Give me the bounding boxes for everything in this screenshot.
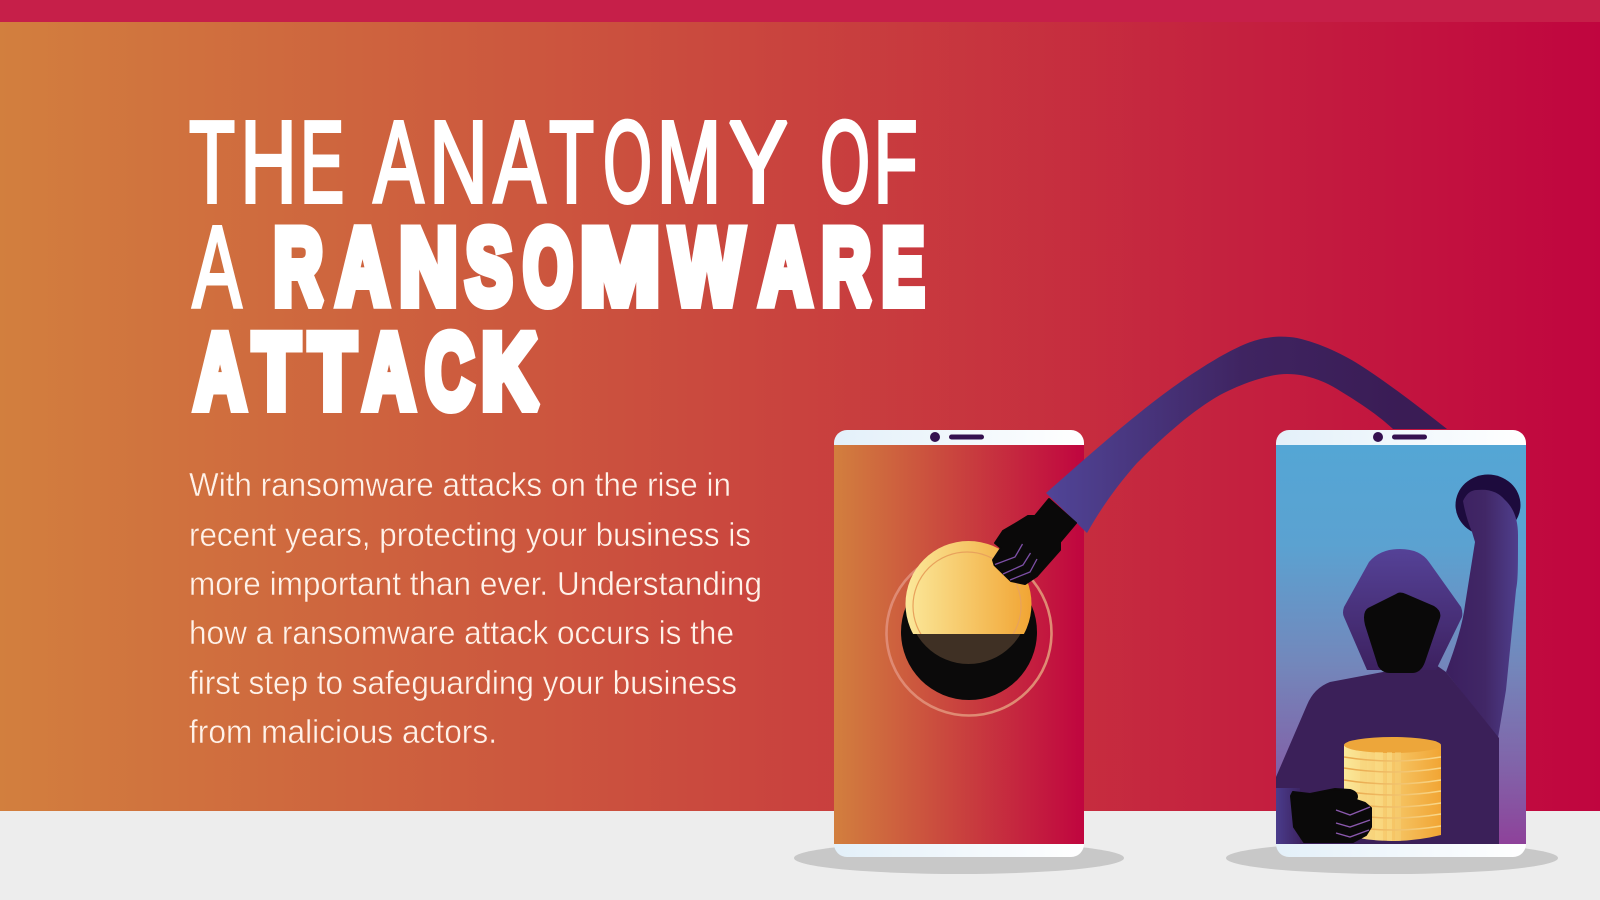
right phone	[1276, 430, 1526, 857]
floor	[0, 811, 1600, 900]
title: W	[671, 206, 743, 326]
title: N	[400, 206, 457, 326]
intro paragraph: With ransomware attacks on the rise in	[189, 466, 731, 503]
title: O	[603, 97, 652, 227]
title: T	[309, 314, 356, 430]
stretching arm between phones	[1046, 337, 1447, 533]
title: M	[580, 206, 660, 326]
title: R	[274, 206, 323, 326]
intro paragraph: from malicious actors.	[189, 713, 497, 750]
intro paragraph: recent years, protecting your business is	[189, 516, 751, 553]
coin inner rim	[912, 551, 1022, 634]
title: E	[882, 206, 924, 326]
title: A	[337, 206, 388, 326]
title: T	[253, 314, 300, 430]
title: O	[523, 206, 573, 326]
coin shaded inside hole	[916, 634, 1020, 664]
right phone speaker	[1392, 434, 1427, 440]
title: C	[426, 314, 474, 430]
top bar	[0, 0, 1600, 22]
title: R	[822, 206, 871, 326]
title: S	[466, 206, 512, 326]
title: H	[240, 97, 297, 227]
coin	[906, 541, 1032, 634]
left phone speaker	[949, 434, 984, 440]
intro paragraph: more important than ever. Understanding	[189, 565, 762, 602]
intro paragraph: first step to safeguarding your business	[189, 664, 737, 701]
title: E	[300, 97, 344, 227]
portal hole	[1456, 474, 1520, 536]
hacker face	[1364, 592, 1440, 673]
title: A	[195, 314, 245, 430]
title: K	[482, 314, 538, 430]
glove reaching for coin	[993, 499, 1076, 584]
title: T	[189, 97, 235, 227]
left phone camera	[930, 432, 940, 442]
ring	[886, 550, 1052, 716]
stack of coins	[1344, 737, 1441, 847]
right phone camera	[1373, 432, 1383, 442]
coin dropping into hole	[886, 541, 1052, 716]
title: A	[760, 206, 811, 326]
intro paragraph	[189, 466, 762, 750]
intro paragraph: how a ransomware attack occurs is the	[189, 614, 734, 651]
hacker hood	[1343, 549, 1462, 670]
title	[189, 97, 924, 430]
title: T	[549, 97, 594, 227]
hacker raised arm	[1446, 490, 1518, 738]
title: A	[374, 97, 424, 227]
left phone	[834, 430, 1084, 857]
title: Y	[728, 97, 787, 227]
title: O	[820, 97, 870, 227]
title: A	[364, 314, 414, 430]
hacker body	[1276, 665, 1499, 844]
hole	[901, 564, 1037, 700]
title: N	[429, 97, 488, 227]
title: A	[193, 202, 242, 332]
hacker glove	[1291, 789, 1371, 842]
shadow under left phone	[794, 842, 1124, 874]
title: M	[657, 97, 721, 227]
title: F	[874, 97, 918, 227]
title: A	[494, 97, 546, 227]
shadow under right phone	[1226, 842, 1558, 874]
hacker sleeve	[1276, 788, 1300, 844]
